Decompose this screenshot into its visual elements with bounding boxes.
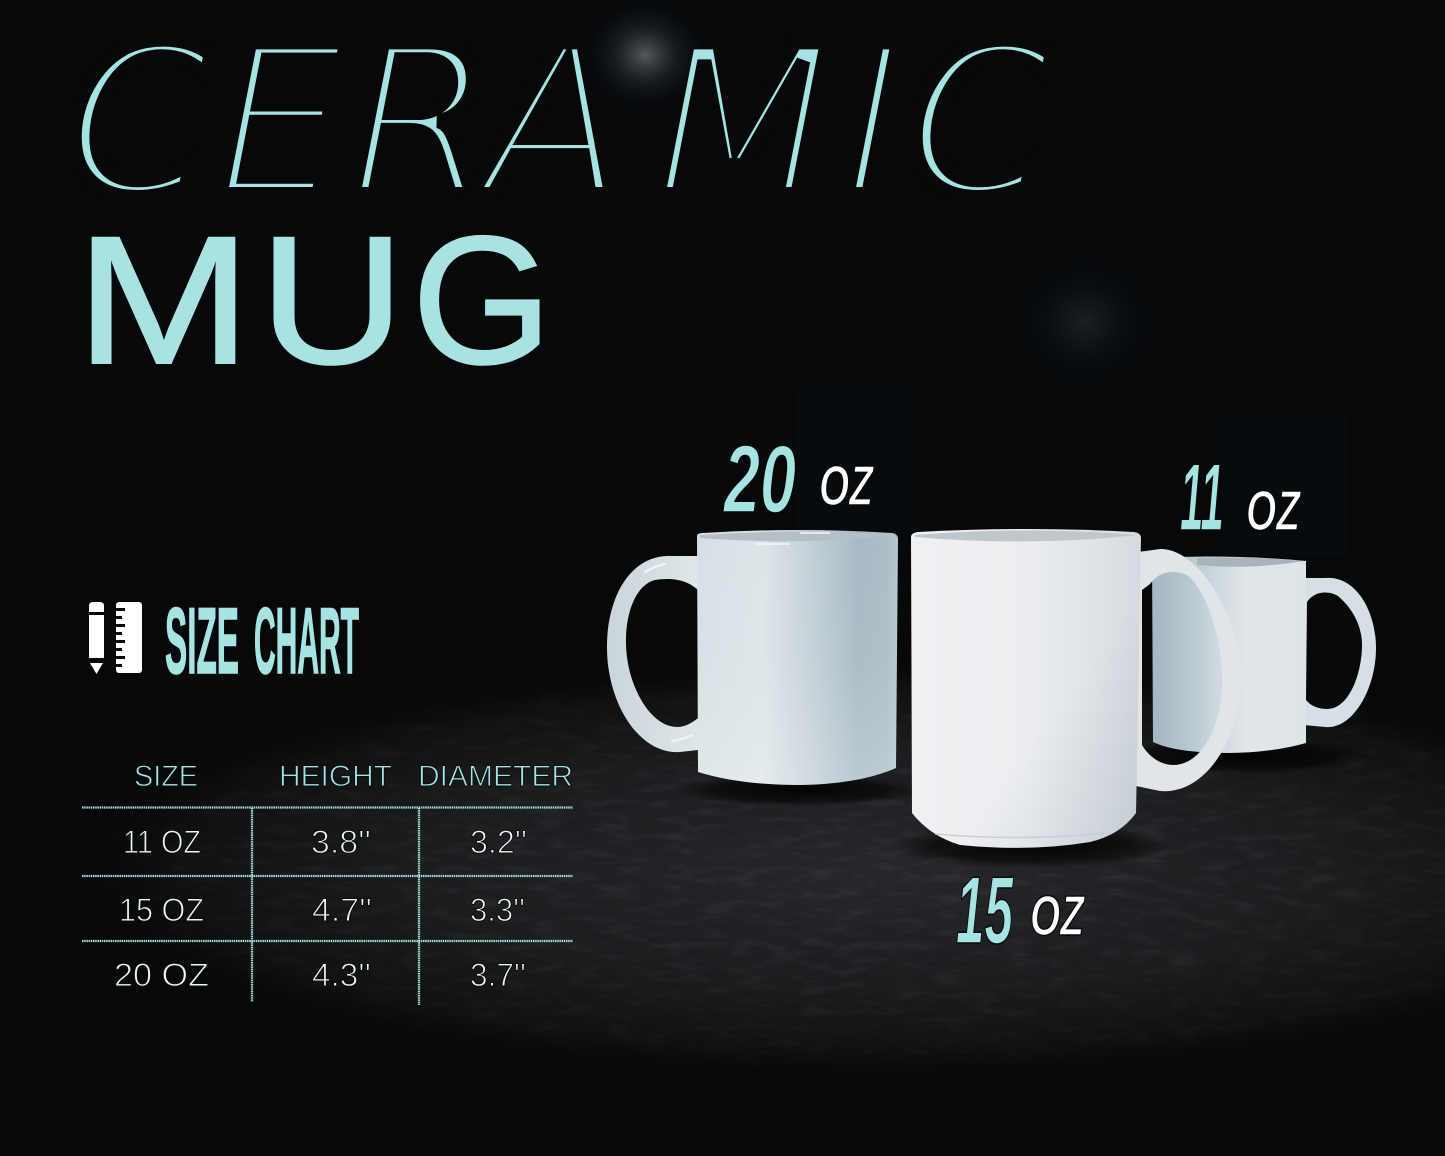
heading: size chart: SIZE — [165, 588, 239, 693]
label: 15 oz: OZ — [1030, 884, 1085, 948]
row: 15 oz: 4.7'' — [312, 892, 372, 928]
title: ceramic: CERAMIC — [66, 2, 1052, 244]
row: 11 oz: 11 OZ — [123, 824, 201, 860]
ambient glow — [583, 0, 1155, 387]
mug: 15 oz — [911, 529, 1241, 848]
label: 15 oz: 15 — [956, 857, 1014, 964]
title: mug: G — [412, 198, 552, 402]
row: 15 oz — [119, 892, 525, 928]
row: 15 oz: 15 OZ — [119, 892, 204, 928]
icon: pencil and ruler — [89, 602, 142, 674]
row: 20 oz — [114, 957, 526, 993]
table header: SIZE — [134, 760, 198, 793]
label: 11 oz: 11 — [1180, 444, 1224, 551]
table grid lines — [82, 808, 573, 1005]
mug: 11 oz — [1152, 557, 1376, 753]
row: 11 oz — [123, 824, 527, 860]
title: mug — [76, 198, 552, 402]
label: 11 oz: OZ — [1246, 479, 1301, 543]
title: mug: M — [76, 198, 252, 402]
row: 15 oz: 3.3'' — [470, 892, 525, 928]
label: 20 oz: 20 — [723, 426, 796, 533]
row: 20 oz: 20 OZ — [114, 957, 209, 993]
table header — [134, 760, 573, 793]
title: mug: U — [259, 198, 405, 402]
row: 11 oz: 3.8'' — [311, 824, 371, 860]
size table — [82, 760, 573, 1005]
table header: HEIGHT — [279, 760, 392, 793]
label: 20 oz: OZ — [819, 454, 874, 518]
row: 11 oz: 3.2'' — [470, 824, 527, 860]
mug: 20 oz — [607, 530, 898, 785]
row: 20 oz: 4.3'' — [312, 957, 371, 993]
infographic canvas: CHART — [254, 588, 359, 693]
background — [156, 688, 1445, 1058]
row: 20 oz: 3.7'' — [470, 957, 526, 993]
table header: DIAMETER — [418, 760, 573, 793]
